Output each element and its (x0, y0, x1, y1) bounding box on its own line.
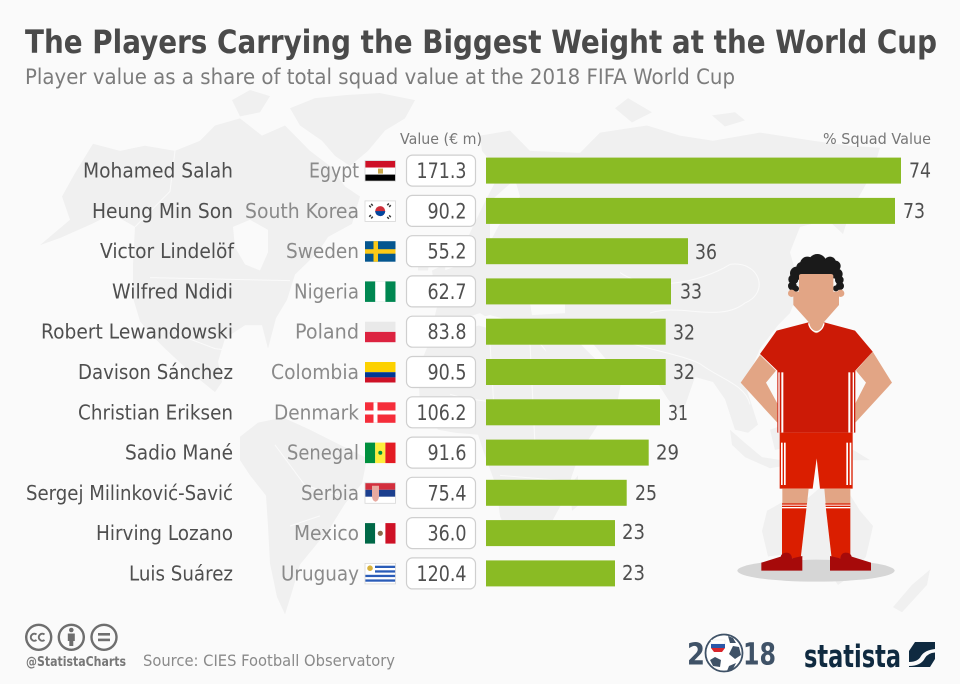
row: Christian Eriksen: 106.2 (416, 401, 466, 425)
row: Mohamed Salah: 171.3 (416, 159, 466, 183)
credit: StatistaCharts: @StatistaCharts (26, 655, 126, 670)
row: Davison Sánchez: Davison Sánchez (78, 360, 233, 384)
row: Davison Sánchez: Colombia (271, 360, 359, 384)
row: Sergej Milinković-Savić (26, 477, 657, 508)
logo: statista: statista (804, 639, 901, 675)
row: Sadio Mané (125, 437, 679, 468)
row: Mohamed Salah: 74 (909, 159, 931, 183)
row: Christian Eriksen: Christian Eriksen (78, 400, 233, 424)
logo: 2018 World Cup: 18 (743, 638, 776, 672)
row: Sergej Milinković-Savić: Sergej Milinković-Savić (26, 481, 233, 505)
row: Luis Suárez: Luis Suárez (129, 561, 233, 585)
row: Robert Lewandowski (41, 316, 695, 347)
row: Luis Suárez: 120.4 (416, 562, 466, 586)
row: Wilfred Ndidi: Nigeria (294, 279, 359, 303)
row: Robert Lewandowski: Poland (295, 320, 359, 344)
icon: footballer illustration (737, 254, 895, 582)
row: Luis Suárez: Uruguay (281, 561, 359, 585)
row: Heung Min Son (92, 195, 925, 226)
row: Luis Suárez (129, 558, 645, 589)
row: Wilfred Ndidi: Wilfred Ndidi (112, 279, 233, 303)
row: Hirving Lozano: 23 (622, 520, 645, 544)
row: Mohamed Salah: Egypt (309, 159, 359, 183)
row: Heung Min Son: 73 (903, 199, 925, 223)
row: Christian Eriksen (78, 397, 688, 428)
row: Heung Min Son: 90.2 (428, 199, 466, 223)
row: Sergej Milinković-Savić: Serbia (301, 481, 359, 505)
row: Heung Min Son: Heung Min Son (92, 199, 233, 223)
row: Christian Eriksen: Denmark (274, 400, 359, 424)
row: Wilfred Ndidi: 33 (680, 279, 702, 303)
row: Victor Lindelöf (100, 236, 717, 267)
row: Sadio Mané: Sadio Mané (125, 441, 233, 465)
row: Victor Lindelöf: Sweden (286, 239, 359, 263)
row: Hirving Lozano: Hirving Lozano (96, 521, 233, 545)
background world map (40, 90, 930, 614)
row: Victor Lindelöf: 36 (695, 240, 717, 264)
column header: value: Value (€ m) (400, 130, 482, 148)
row: Mohamed Salah: Mohamed Salah (83, 159, 233, 183)
row: Sadio Mané: 29 (656, 441, 679, 465)
row: Wilfred Ndidi: 62.7 (428, 280, 466, 304)
row: Robert Lewandowski: 83.8 (428, 320, 466, 344)
row: Heung Min Son: South Korea (245, 199, 359, 223)
row: Mohamed Salah (83, 155, 931, 186)
row: Wilfred Ndidi (112, 276, 702, 307)
row: Luis Suárez: 23 (622, 561, 645, 585)
row: Sergej Milinković-Savić: 75.4 (428, 481, 466, 505)
row: Davison Sánchez: 32 (673, 360, 695, 384)
row: Robert Lewandowski: 32 (673, 321, 695, 345)
row: Sergej Milinković-Savić: 25 (635, 481, 657, 505)
row: Hirving Lozano (96, 518, 645, 549)
logo: 2018 World Cup (687, 634, 776, 672)
row: Victor Lindelöf: Victor Lindelöf (100, 239, 235, 263)
source: Source: CIES Football Observatory (143, 651, 395, 670)
icon: creative commons badges (26, 625, 117, 650)
row: Davison Sánchez (78, 356, 695, 388)
logo: 2018 World Cup: 2 (687, 638, 705, 672)
column header: squad value: % Squad Value (823, 130, 931, 148)
row: Hirving Lozano: 36.0 (428, 522, 466, 546)
row: Sadio Mané: Senegal (287, 441, 359, 465)
row: Christian Eriksen: 31 (668, 401, 688, 425)
row: Sadio Mané: 91.6 (428, 441, 466, 465)
row: Victor Lindelöf: 55.2 (428, 240, 466, 264)
row: Davison Sánchez: 90.5 (428, 360, 466, 384)
subtitle: Player value as a share of total squad value at the 2018 FIFA World Cup (25, 65, 735, 89)
row: Hirving Lozano: Mexico (294, 521, 359, 545)
row: Robert Lewandowski: Robert Lewandowski (41, 320, 233, 344)
